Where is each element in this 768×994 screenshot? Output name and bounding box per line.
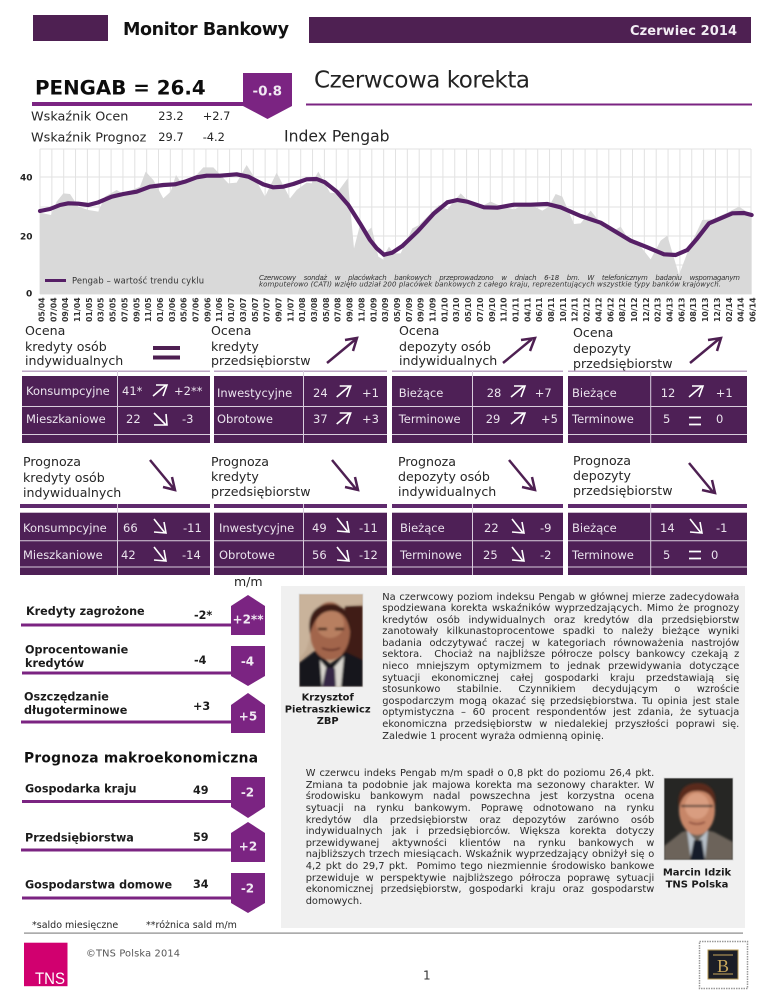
heading: kredyty [211,469,259,484]
chart title: Index Pengab [284,128,390,146]
legend: Pengab – wartość trendu cyklu [72,276,204,286]
x axis labels: 05/10 [464,297,473,322]
icon: equal sign [153,348,180,358]
x axis labels: 07/06 [192,297,200,322]
row: Gospodarka kraju: 49 [193,784,209,797]
row: Gospodarka kraju: -2 [241,786,254,800]
row: Oszczędzanie długoterminowe [21,690,265,733]
heading: depozyty osób [398,469,490,484]
caption: Krzysztof Pietraszkiewicz, ZBP: ZBP [317,716,339,727]
table: 0 [711,548,718,562]
row: Oprocentowanie kredytów: -4 [241,654,254,668]
x axis labels: 02/13 [654,297,663,322]
header bar: right with date: Czerwiec 2014 [630,24,737,39]
x axis labels: 05/09 [393,297,402,322]
text block: commentary by Marcin Idzik [306,768,654,907]
table: Bieżące [399,386,443,400]
x axis labels: 11/08 [357,297,366,322]
row: Gospodarka kraju: Gospodarka kraju [25,783,137,796]
x axis labels: 07/09 [405,297,414,322]
panel: Prognoza depozyty osób indywidualnych [392,454,563,575]
text block: commentary by Krzysztof Pietraszkiewicz: kredytów osób indywidualnych oraz kredytów dla przedsiębiorstw [382,615,739,626]
table: 24 [313,386,328,400]
x axis labels: 07/04 [49,297,58,322]
table: -11 [359,521,378,535]
table [214,370,387,443]
table: -11 [183,521,202,535]
table: +3 [362,412,379,426]
table: +1 [716,386,733,400]
table: 66 [123,521,138,535]
heading: Prognoza [211,454,269,469]
photo: Krzysztof Pietraszkiewicz [299,594,363,687]
table: -1 [716,521,727,535]
table: Obrotowe [219,548,275,562]
text block: commentary by Krzysztof Pietraszkiewicz: nieco mniejszym optymizmem to jednak przewidywania dotyczące [382,661,739,672]
row: Gospodarstwa domowe [22,873,265,913]
x axis labels: 10/13 [701,297,710,322]
y axis labels: 40 [20,174,33,184]
row: Przedsiębiorstwa: 59 [193,831,209,844]
text block: commentary by Krzysztof Pietraszkiewicz: Zaledwie 1 procent wyraża odmienną opinię. [382,731,604,742]
table: 14 [660,521,675,535]
x axis labels: 04/13 [666,297,674,322]
row: Gospodarka kraju [22,777,265,818]
text block: commentary by Marcin Idzik: W czerwcu indeks Pengab m/m spadł o 0,8 pkt do poziomu 26,4 pkt. [306,768,654,779]
x axis labels: 09/07 [274,297,284,322]
x axis labels: 11/06 [215,297,224,322]
table: Terminowe [399,548,462,562]
x axis labels: 09/04 [61,297,70,322]
table [214,504,387,575]
icon: arrow up [503,338,535,363]
heading: przedsiębiorstw [211,353,311,368]
icon: arrow down [150,460,175,490]
row: Oprocentowanie kredytów [22,644,265,686]
heading: przedsiębiorstw [211,484,311,499]
text block: commentary by Marcin Idzik: indywidualnych jak i przedsiębiorców. Większa korekta dotyczy [306,826,654,837]
heading: Ocena [25,323,65,338]
text block: commentary by Marcin Idzik: domowych. [306,896,362,907]
x axis labels: 01/06 [156,297,165,322]
table: 37 [313,412,328,426]
heading: przedsiębiorstw [573,356,673,371]
row: Gospodarstwa domowe: Gospodarstwa domowe [25,879,172,892]
caption: Marcin Idzik, TNS Polska [663,868,732,890]
x axis labels: 05/08 [322,297,331,322]
copyright: ©TNS Polska 2014 [86,948,180,960]
text block: commentary by Krzysztof Pietraszkiewicz: spodziewana korekta wskaźników wyprzedzających. Mimo że prognozy [382,603,739,614]
footnotes: *saldo miesięczne [32,920,118,931]
x axis labels: 05/07 [251,297,260,322]
row: Kredyty zagrożone [21,595,265,635]
footnotes: **różnica sald m/m [146,920,237,931]
table: -9 [540,521,551,535]
heading: kredyty [211,339,259,354]
table: Bieżące [400,521,445,535]
header [33,15,751,43]
x axis labels: 11/05 [144,297,153,322]
heading: Ocena [399,323,439,338]
row: Oprocentowanie kredytów: -4 [194,654,207,667]
sub-indicators: -4.2 [203,130,225,144]
x axis labels: 01/05 [85,297,94,322]
caption: Krzysztof Pietraszkiewicz, ZBP: Pietraszkiewicz [285,704,371,716]
heading: Prognoza [398,454,456,469]
x axis labels: 01/10 [440,297,449,322]
text block: commentary by Krzysztof Pietraszkiewicz: badania odczytywać raczej w kategoriach równoważenia nastrojów [382,638,739,649]
text block: commentary by Marcin Idzik: Zmiana ta podobnie jak majowa korekta ma sezonowy charakter. W [306,780,654,791]
x axis labels: 07/05 [120,297,129,322]
icon: arrow down [509,460,535,490]
x axis labels: 04/11 [523,297,532,322]
x axis labels: 06/11 [535,297,544,322]
x axis labels: 03/10 [452,297,461,322]
table: -3 [182,412,193,426]
x axis labels: 09/08 [346,297,355,322]
survey note [259,274,740,288]
x axis labels: 01/11 [512,297,520,322]
icon: arrow down [689,463,715,493]
x axis labels: 01/09 [369,297,378,322]
x axis labels: 09/05 [132,297,141,322]
x axis labels: 09/06 [203,297,212,322]
panel: Ocena depozyty przedsiębiorstw [568,325,747,443]
icon: arrow up [690,338,721,363]
table: +2** [174,384,203,398]
table: 22 [126,412,141,426]
heading: kredyty osób [23,470,105,485]
heading: indywidualnych [398,484,496,499]
x axis labels: 01/08 [298,297,307,322]
text block: commentary by Marcin Idzik: 4,2 pkt do 29,7 pkt. Pomimo tego niezmiennie środowisko bankowe [306,861,654,872]
x axis labels: 03/05 [97,297,106,322]
heading: kredyty osób [25,339,107,354]
sub-indicators: Wskaźnik Prognoz [31,131,147,146]
text block: commentary by Marcin Idzik: przewidywanej aktywności klientów na rynku bankowych w [306,838,654,849]
heading: Prognoza makroekonomiczna: Prognoza makroekonomiczna [24,750,258,766]
table: -14 [182,548,201,562]
text block: commentary by Krzysztof Pietraszkiewicz: Na czerwcowy poziom indeksu Pengab w głównej mierze zadecydowała [382,592,739,602]
x axis labels: 10/11 [559,297,568,322]
table: 29 [486,412,500,426]
table: 41* [122,384,143,398]
badge: index change: -0.8 [253,84,282,100]
panel: commentary background [281,586,745,928]
table: Terminowe [571,548,634,562]
table: 5 [663,412,670,426]
main heading: Czerwcowa korekta [314,67,530,93]
caption: Krzysztof Pietraszkiewicz, ZBP: Krzysztof [302,692,354,704]
header title: Monitor Bankowy [123,20,290,40]
table: Inwestycyjne [219,521,294,535]
icon: arrow up [327,338,357,363]
table: 49 [312,521,327,535]
survey note: Czerwcowy sondaż w placówkach bankowych przeprowadzono w dniach 6-18 bm. W telefonicznym badaniu wspomaganym [259,274,740,282]
panel: Prognoza depozyty przedsiębiorstw [568,453,747,575]
table [392,504,563,575]
table: 22 [484,521,499,535]
x axis labels: 05/06 [180,297,189,322]
text block: commentary by Marcin Idzik: sytuacji na rynku bankowym. Poprawę odnotowano na rynku [306,803,654,814]
x axis labels: 02/14 [725,297,734,322]
x axis labels: 11/10 [500,297,509,322]
table: Inwestycyjne [217,386,292,400]
text block: commentary by Krzysztof Pietraszkiewicz: gospodarczym mogą okazać się przedsiębiorstwa. Tu opinia jest stale [382,696,739,707]
text block: commentary by Krzysztof Pietraszkiewicz: ekonomiczna przedsiębiorstw w niedalekiej przyszłości poprawi się. [382,719,739,730]
x axis labels: 12/12 [642,297,651,322]
table: Mieszkaniowe [23,548,103,562]
sub-indicators: Wskaźnik Ocen [31,110,128,125]
text block: commentary by Krzysztof Pietraszkiewicz [382,592,739,742]
heading: indywidualnych [25,353,123,368]
row: Przedsiębiorstwa [21,822,265,862]
sub-indicators: +2.7 [203,109,230,123]
sub-indicators: 29.7 [158,130,184,144]
logo: bank association seal: B [717,956,729,976]
text block: commentary by Marcin Idzik: najbliższych trzech miesiącach. Wskaźnik wyprzedzający obniżył się o [306,849,654,860]
x axis labels: 04/12 [594,297,603,322]
chart: Index Pengab [20,149,758,322]
x axis labels: 07/07 [263,297,272,322]
panel: Ocena kredyty przedsiębiorstw [211,323,387,443]
index headline [32,76,244,106]
row: Przedsiębiorstwa: +2 [239,840,257,854]
x axis labels: 03/06 [168,297,177,322]
table: -2 [540,548,551,562]
header bar: left [33,15,108,41]
logo: bank association seal [700,942,748,988]
heading: indywidualnych [399,353,497,368]
table: 42 [121,548,136,562]
text block: commentary by Marcin Idzik: środowisku bankowym nadal powszechna jest korzystna ocena [306,791,654,802]
heading: depozyty [573,468,631,483]
text block: commentary by Krzysztof Pietraszkiewicz: sektora. Chociaż na najbliższe półrocze polscy bankowcy czekają z [382,649,739,660]
row: Oszczędzanie długoterminowe: +3 [193,700,210,713]
logo: TNS [24,943,68,988]
text block: commentary by Marcin Idzik: kredytów dla przedsiębiorstw oraz depozytów zarówno osób [306,815,654,826]
area: monthly index [40,165,752,294]
row: Gospodarstwa domowe: -2 [241,882,254,896]
caption: Krzysztof Pietraszkiewicz, ZBP [285,692,371,727]
text block: commentary by Krzysztof Pietraszkiewicz: sytuacji ekonomicznej całej gospodarki kraju przedstawiają się [382,673,739,684]
page number: 1 [423,968,431,982]
table: +5 [541,412,558,426]
x axis labels: 11/09 [428,297,438,322]
row: Kredyty zagrożone: +2** [233,612,264,626]
y axis labels [20,174,33,300]
text block: commentary by Krzysztof Pietraszkiewicz: optymistyczna – 60 procent respondentów jest zdania, że sytuacja [382,707,739,718]
x axis labels: 09/09 [417,297,426,322]
table [568,504,747,575]
footnotes [32,920,237,931]
table: Obrotowe [217,412,273,426]
heading: depozyty osób [399,339,491,354]
row: Gospodarstwa domowe: 34 [193,878,209,891]
table: +7 [535,386,552,400]
row: Oszczędzanie długoterminowe: długoterminowe [24,704,128,717]
heading: Ocena [211,323,251,338]
x axis labels: 06/12 [606,297,615,322]
x axis labels: 03/09 [381,297,390,322]
badge: index change [243,73,292,119]
x axis labels: 05/05 [109,297,118,322]
table [22,370,210,443]
panel: Prognoza kredyty przedsiębiorstw [211,454,387,575]
y axis labels: 20 [20,232,33,242]
panel: Ocena kredyty osób indywidualnych [22,323,210,443]
table: 25 [483,548,498,562]
heading: indywidualnych [23,485,121,500]
line: trend of the cycle [40,174,752,255]
heading: depozyty [573,341,631,356]
heading: przedsiębiorstw [573,483,673,498]
table: Konsumpcyjne [23,521,107,535]
caption: Marcin Idzik, TNS Polska: Marcin Idzik [663,868,732,878]
table: Terminowe [398,412,461,426]
row: Przedsiębiorstwa: Przedsiębiorstwa [25,832,134,845]
x axis labels: 06/14 [748,297,758,322]
row: Oszczędzanie długoterminowe: +5 [239,710,257,724]
x axis labels: 11/07 [286,297,295,322]
heading: Prognoza [23,454,81,469]
x axis labels: 11/04 [73,297,82,322]
x axis labels [38,297,758,322]
row: Kredyty zagrożone: -2* [194,609,212,622]
footer rule [24,932,743,934]
x axis labels: 08/11 [547,297,556,322]
x axis labels: 12/13 [713,297,722,322]
table: 5 [663,548,670,562]
x axis labels: 08/13 [689,297,698,322]
x axis labels: 05/04 [38,297,46,322]
x axis labels: 10/12 [630,297,639,322]
table: +1 [362,386,379,400]
table: 12 [661,386,675,400]
table: -12 [359,548,378,562]
x axis labels: 08/12 [618,297,627,322]
sub-indicators: 23.2 [158,109,184,123]
text block: commentary by Marcin Idzik: przewiduje w perspektywie najbliższego półrocza poprawę sytuacji [306,873,654,884]
table: Terminowe [571,412,634,426]
icon: arrow down [332,460,358,490]
text block: commentary by Marcin Idzik: ekonomicznej przedsiębiorstw, gospodarki kraju oraz gospodarstw [306,884,654,895]
table: 56 [312,548,327,562]
heading: Ocena [573,325,613,340]
table: Bieżące [572,386,617,400]
x axis labels: 06/13 [677,297,686,322]
index headline: PENGAB = 26.4 [35,76,206,99]
row: Oprocentowanie kredytów: Oprocentowanie [25,644,129,656]
panel: Prognoza kredyty osób indywidualnych [20,454,210,575]
table: Mieszkaniowe [26,412,106,426]
row: Kredyty zagrożone: Kredyty zagrożone [26,605,145,618]
photo: Marcin Idzik [664,778,733,860]
x axis labels: 01/07 [227,297,236,322]
column label: m/m: m/m [234,574,263,589]
caption: Marcin Idzik, TNS Polska: TNS Polska [666,880,728,890]
x axis labels: 09/10 [488,297,497,322]
table: 28 [487,386,501,400]
x axis labels: 07/10 [476,297,485,322]
survey note: komputerowo (CATI) wzięło udział 200 placówek bankowych z całego kraju, reprezentujących wszystkie typy banków krajowych. [259,280,721,288]
table: 0 [716,412,723,426]
panel: Ocena depozyty osób indywidualnych [392,323,563,443]
table [568,370,747,443]
row: Oszczędzanie długoterminowe: Oszczędzanie [24,690,109,704]
header bar: right with date [309,17,751,43]
table: Bieżące [572,521,617,535]
text block: commentary by Krzysztof Pietraszkiewicz: zanotowały kilkunastoprocentowe spadki to należy bieżące wyniki [382,626,739,637]
x axis labels: 03/07 [239,297,248,322]
y axis labels: 0 [26,290,32,300]
x axis labels: 07/08 [334,297,343,322]
table [392,370,563,443]
text block: commentary by Krzysztof Pietraszkiewicz: stosunkowo stabilnie. Czynnikiem decydującym o wzroście [382,684,739,695]
x axis labels: 12/11 [571,297,580,322]
logo: TNS: TNS [35,970,65,988]
row: Oprocentowanie kredytów: kredytów [25,657,84,670]
x axis labels: 04/14 [737,297,746,322]
table [20,504,210,575]
x axis labels: 02/12 [583,297,592,322]
sub-indicators [31,109,230,146]
table: Konsumpcyjne [26,384,110,398]
x axis labels: 03/08 [310,297,319,322]
heading: Prognoza [573,453,631,468]
